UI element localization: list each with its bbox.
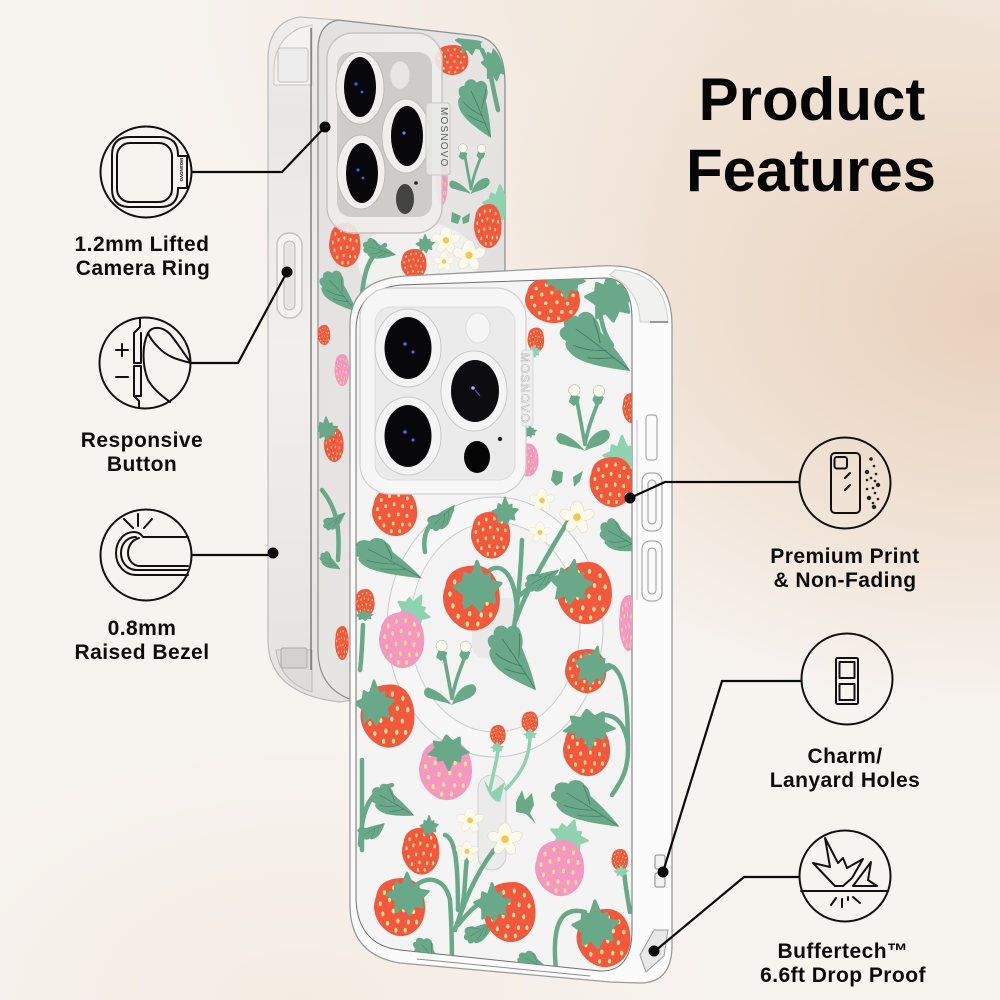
back camera module [327, 33, 450, 233]
back case side band [268, 17, 352, 702]
back phone case [268, 17, 517, 720]
stems [360, 300, 630, 970]
leader line [191, 272, 287, 363]
front phone case [350, 265, 672, 983]
callout: 1.2mm lifted camera ring: Camera Ring [76, 257, 210, 280]
callout: charm lanyard holes [658, 634, 920, 878]
front camera module [360, 288, 533, 494]
front case side buttons [637, 415, 662, 601]
callout: responsive button: Button [107, 453, 177, 476]
callout: premium print and non-fading: & Non-Fading [773, 569, 917, 592]
front case MOSNOVO mark: MOSNOVO [518, 353, 530, 424]
title: Product Features [686, 66, 936, 204]
front case clear face [356, 278, 632, 971]
label: 1.2mm Lifted [75, 233, 209, 256]
callout: 1.2mm lifted camera ring [75, 122, 330, 280]
back lenses [336, 52, 430, 214]
icon: drop impact [800, 830, 890, 922]
callout: premium print and non-fading [624, 438, 920, 592]
leader line [655, 877, 799, 951]
callout: buffertech drop proof: 6.6ft Drop Proof [760, 964, 926, 987]
icon: raised bezel [100, 510, 192, 600]
label: Responsive [81, 429, 203, 452]
leader line [663, 681, 801, 872]
title: Product Features: Features [686, 137, 936, 204]
charm lanyard holes [655, 855, 665, 887]
leader line [192, 554, 273, 556]
icon: printed case with stars [800, 438, 890, 528]
label: Premium Print [770, 545, 920, 568]
icon: camera ring: MOSNOVO [179, 158, 184, 182]
buffer corner [640, 930, 668, 972]
icon: lanyard holes [802, 634, 892, 724]
front case strawberry pattern [351, 265, 643, 974]
back case face [318, 20, 505, 720]
label: 0.8mm [108, 617, 176, 640]
icon: button press [100, 318, 191, 408]
leader line [192, 127, 325, 172]
back case MOSNOVO mark: MOSNOVO [438, 107, 449, 168]
leaves [351, 271, 643, 974]
label: Charm/ [807, 745, 883, 768]
leader line [630, 482, 799, 498]
back case strawberry pattern [314, 25, 517, 660]
callout: responsive button [81, 266, 292, 476]
blossoms [456, 489, 594, 861]
bottom edge slots [417, 959, 590, 976]
callout: buffertech drop proof [648, 830, 926, 987]
label: Buffertech™ [778, 940, 908, 963]
front case body [350, 266, 672, 983]
magsafe ring [387, 497, 603, 870]
icon: camera ring [100, 126, 192, 218]
red and pink strawberries [355, 265, 641, 967]
front lenses [375, 309, 507, 475]
back case side button [277, 233, 302, 318]
callout: 0.8mm raised bezel [75, 510, 278, 664]
callout: charm lanyard holes: Lanyard Holes [770, 769, 920, 792]
callout: 0.8mm raised bezel: Raised Bezel [75, 641, 209, 664]
title: Product Features: Product [699, 66, 925, 133]
